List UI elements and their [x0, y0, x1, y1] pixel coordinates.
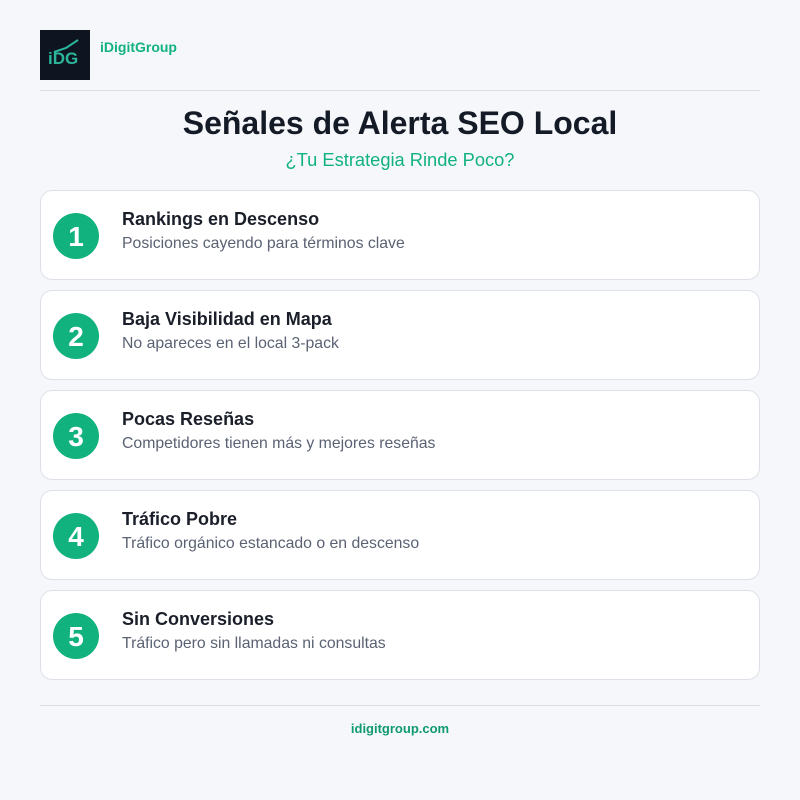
- card 2: No apareces en el local 3-pack: [122, 335, 339, 352]
- card 5: 5: [68, 621, 84, 652]
- card 1: Rankings en Descenso: [122, 209, 319, 229]
- card 3: [40, 390, 760, 480]
- card 5: Sin Conversiones: [122, 609, 274, 629]
- logo: iDG: [48, 49, 78, 68]
- card 1: 1: [68, 221, 84, 252]
- brand name: iDigitGroup: [100, 39, 177, 55]
- card 1: [40, 190, 760, 280]
- card 4: [40, 490, 760, 580]
- card 1: Posiciones cayendo para términos clave: [122, 235, 405, 252]
- card 3: Competidores tienen más y mejores reseñas: [122, 435, 435, 452]
- card 4: 4: [68, 521, 84, 552]
- card 2: Baja Visibilidad en Mapa: [122, 309, 332, 329]
- card 4: Tráfico Pobre: [122, 509, 237, 529]
- card 2: 2: [68, 321, 84, 352]
- card 4: Tráfico orgánico estancado o en descenso: [122, 535, 419, 552]
- logo: [40, 30, 90, 80]
- title: Señales de Alerta SEO Local: [183, 105, 617, 141]
- subtitle: ¿Tu Estrategia Rinde Poco?: [286, 149, 514, 170]
- card 5: [40, 590, 760, 680]
- card 2: [40, 290, 760, 380]
- card 3: Pocas Reseñas: [122, 409, 254, 429]
- card 3: 3: [68, 421, 84, 452]
- footer: idigitgroup.com: [351, 721, 449, 736]
- card 5: Tráfico pero sin llamadas ni consultas: [122, 635, 386, 652]
